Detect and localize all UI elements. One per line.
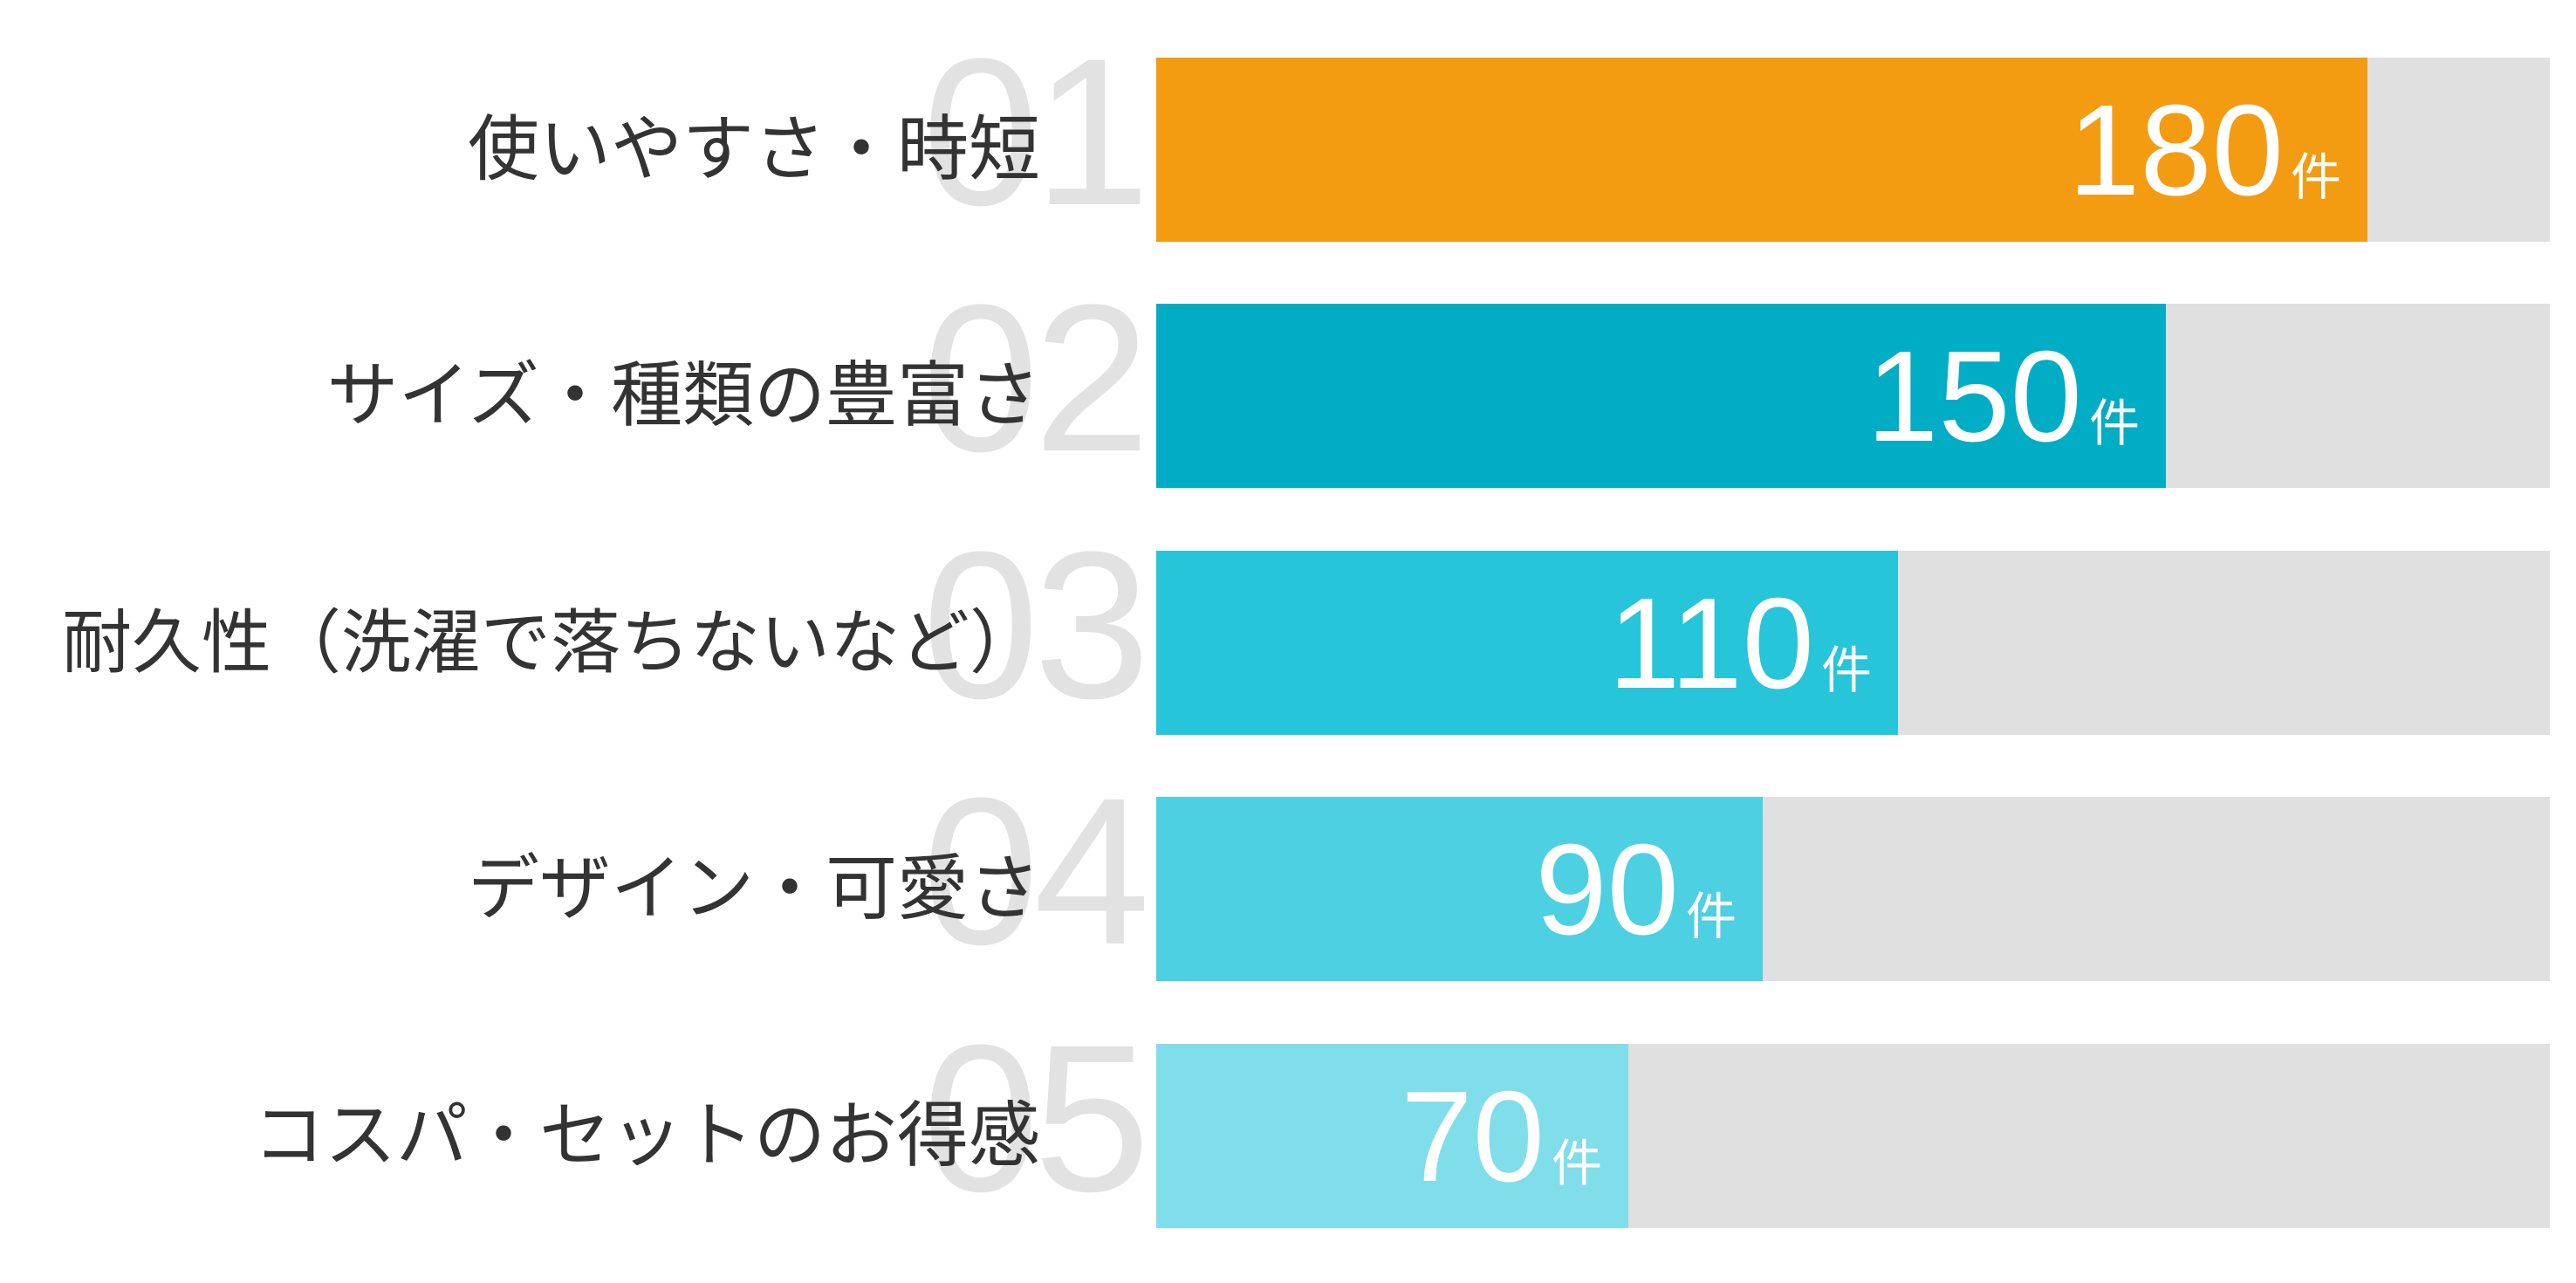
row 5 xyxy=(253,1001,2550,1235)
label 4: デザイン・可愛さ xyxy=(468,849,1040,929)
bar 4: 90件 xyxy=(1535,818,1737,962)
rank number 04: 04 xyxy=(922,754,1145,988)
row 1 xyxy=(468,15,2550,1190)
bar 5: 70件 xyxy=(1401,1065,1602,1209)
label 2: サイズ・種類の豊富さ xyxy=(326,356,1040,436)
label 5: コスパ・セットのお得感 xyxy=(253,1096,1040,1176)
bar 3 xyxy=(1156,551,2550,735)
bar 5 xyxy=(1156,1044,2550,1228)
row 4 xyxy=(468,754,2550,1190)
row 2 xyxy=(326,261,2550,1190)
row 3 xyxy=(62,508,2550,1190)
label 1: 使いやすさ・時短 xyxy=(468,110,1040,189)
rank number 01: 01 xyxy=(922,15,1145,249)
bar 2: 150件 xyxy=(1867,325,2140,469)
rank number 02: 02 xyxy=(922,261,1145,495)
bar 2 xyxy=(1156,304,2550,488)
bar 1 xyxy=(1156,58,2550,242)
rank number 05: 05 xyxy=(922,1001,1145,1235)
label 3: 耐久性（洗濯で落ちないなど） xyxy=(62,604,1039,682)
bar 1: 180件 xyxy=(2068,79,2341,223)
bar 4 xyxy=(1156,797,2550,981)
bar 3: 110件 xyxy=(1608,572,1872,716)
rank number 03: 03 xyxy=(922,508,1145,742)
